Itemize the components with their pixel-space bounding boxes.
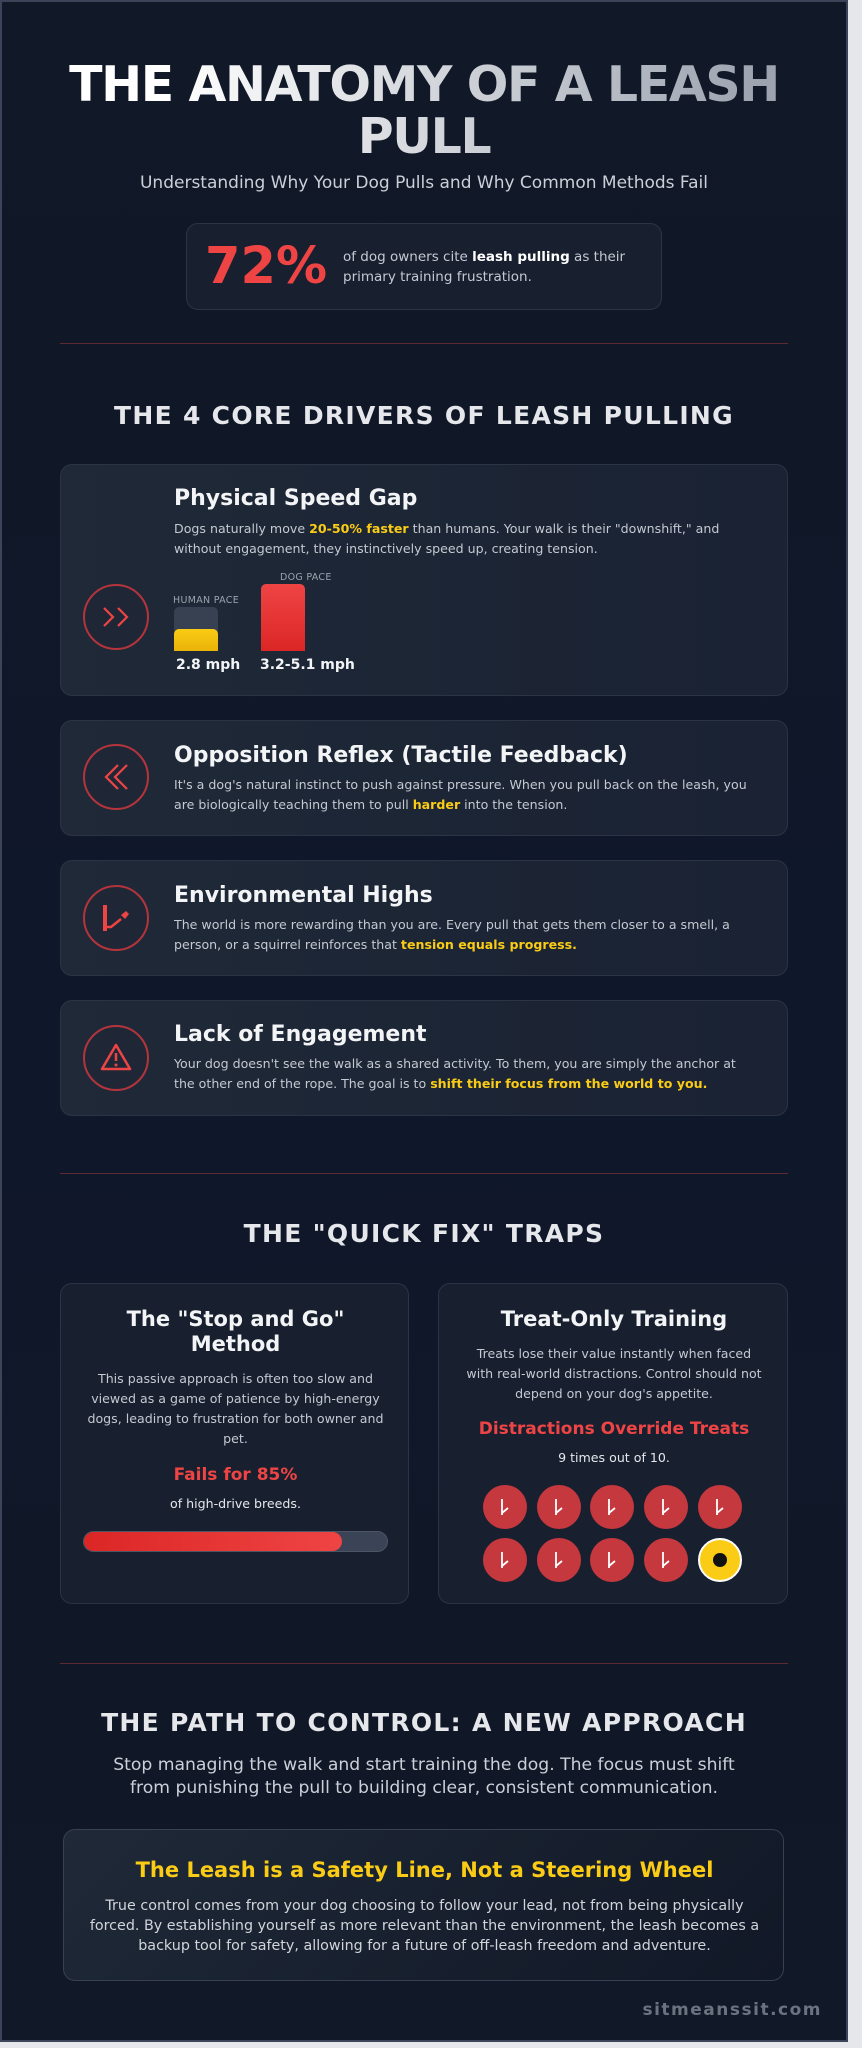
card: physical speed gap: [60, 464, 788, 696]
heading: path to control: THE PATH TO CONTROL: A NEW APPROACH: [101, 1708, 747, 1737]
text: path intro: [113, 1755, 735, 1798]
icon: leash: [83, 885, 149, 951]
title: treat-only: Treat-Only Training: [501, 1307, 727, 1331]
callout text: [90, 1898, 759, 1954]
title: physical speed gap: Physical Speed Gap: [174, 486, 417, 511]
title: stop and go: The "Stop and Go": [127, 1307, 344, 1331]
stat: distractions: Distractions Override Treats: [479, 1419, 749, 1439]
stat box: [186, 223, 662, 310]
card: lack of engagement: [60, 1000, 788, 1116]
bar chart: pace: [173, 572, 355, 673]
bar chart: pace: 3.2-5.1 mph: [260, 657, 355, 673]
text: treat-only: Treats lose their value instantly when faced with real-world distractions. Control should not depend on your dog's appetite.: [466, 1346, 762, 1401]
panel: stop and go: [60, 1283, 409, 1604]
title: lack of engagement: Lack of Engagement: [174, 1022, 427, 1047]
text: environmental: The world is more rewarding than you are. Every pull that gets them closer to a smell, a person, or a squirrel reinforces that tension equals progress.: [174, 917, 730, 952]
title: opposition reflex: Opposition Reflex (Tactile Feedback): [174, 743, 628, 768]
text: stop and go: This passive approach is often too slow and viewed as a game of patience by high-energy dogs, leading to frustration for both owner and pet.: [87, 1371, 384, 1446]
bar chart: pace: 2.8 mph: [176, 657, 240, 673]
text: path intro: from punishing the pull to building clear, consistent communication.: [130, 1778, 718, 1798]
bar chart: pace: HUMAN PACE: [173, 595, 239, 606]
subtitle: Understanding Why Your Dog Pulls and Why Common Methods Fail: [140, 173, 708, 193]
bar chart: pace: DOG PACE: [280, 572, 332, 583]
card: environmental highs: [60, 860, 788, 976]
icon grid: 9 of 10: [483, 1485, 742, 1582]
callout text: backup tool for safety, allowing for a future of off-leash freedom and adventure.: [138, 1938, 711, 1954]
callout: safety line: [63, 1829, 784, 1981]
panel: treat-only: [438, 1283, 788, 1604]
title: environmental highs: Environmental Highs: [174, 883, 433, 908]
stat: fails 85%: Fails for 85%: [174, 1465, 297, 1485]
icon: forward chevrons: [83, 584, 149, 650]
text: opposition: It's a dog's natural instinct to push against pressure. When you pull back on the leash, you are biologically teaching them to pull harder into the tension.: [174, 777, 747, 812]
title: THE ANATOMY OF A LEASH: [69, 56, 779, 113]
panel: treat-only: 9 times out of 10.: [558, 1450, 670, 1465]
callout title: The Leash is a Safety Line, Not a Steering Wheel: [136, 1858, 713, 1882]
title: PULL: [358, 108, 490, 165]
heading: core drivers: THE 4 CORE DRIVERS OF LEASH PULLING: [114, 401, 734, 430]
panel: stop and go: of high-drive breeds.: [170, 1496, 301, 1511]
title: stop and go: [126, 1307, 344, 1356]
heading: quick fix traps: THE "QUICK FIX" TRAPS: [244, 1219, 604, 1248]
progress bar: [83, 1531, 388, 1552]
card: opposition reflex: [60, 720, 788, 836]
title: stop and go: Method: [191, 1332, 280, 1356]
footer: brand: sitmeanssit.com: [642, 2000, 822, 2020]
title: [0, 59, 848, 163]
text: engagement: Your dog doesn't see the walk as a shared activity. To them, you are simply the anchor at the other end of the rope. The goal is to shift their focus from the world to you.: [174, 1056, 736, 1091]
stat number: 72%: [205, 237, 327, 296]
text: path intro: Stop managing the walk and start training the dog. The focus must shift: [113, 1755, 735, 1775]
stat text: of dog owners cite leash pulling as their primary training frustration.: [343, 249, 625, 285]
text: speed gap: Dogs naturally move 20-50% faster than humans. Your walk is their "downshift," and without engagement, they instinctively speed up, creating tension.: [174, 521, 719, 556]
icon: back chevrons: [83, 744, 149, 810]
icon: warning: [83, 1025, 149, 1091]
callout text: forced. By establishing yourself as more relevant than the environment, the leash becomes a: [90, 1918, 759, 1934]
callout text: True control comes from your dog choosing to follow your lead, not from being physically: [105, 1898, 744, 1914]
